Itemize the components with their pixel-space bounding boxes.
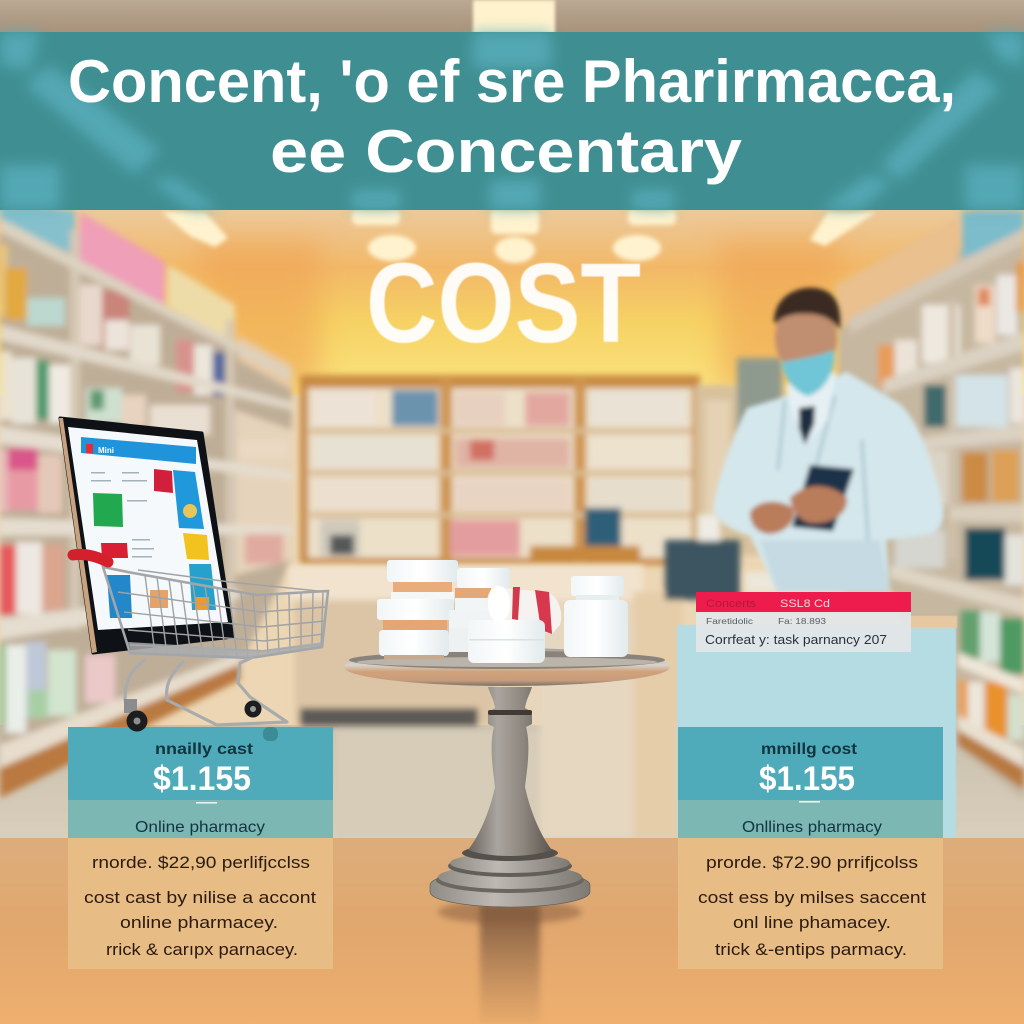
tablet with store screen — [59, 418, 233, 653]
card: right online pharmacy: onl line phamacey. — [733, 913, 891, 932]
card: right online pharmacy: prorde. $72.90 prrifjcolss — [706, 853, 918, 872]
shelf edges — [0, 218, 292, 380]
white coat — [713, 372, 944, 592]
wire basket — [118, 570, 328, 657]
ceiling lights — [162, 209, 876, 263]
shelf four goods — [0, 545, 16, 615]
far shelf goods — [235, 410, 292, 575]
pedestal stand — [344, 648, 670, 907]
wood table — [0, 838, 1024, 1024]
card: left online pharmacy — [68, 727, 333, 969]
shelf three goods — [962, 452, 988, 502]
coat folds — [778, 395, 868, 540]
card: left online pharmacy: rrick & carıpx parnacey. — [106, 940, 298, 959]
back wall shelves — [300, 358, 785, 565]
shelf one goods — [878, 345, 894, 387]
heading: ee Concentary — [270, 118, 743, 185]
counter panel — [677, 616, 957, 838]
tablet with store screen: Mini — [98, 446, 114, 455]
pharmacy comparison label: SSL8 Cd — [780, 598, 830, 610]
card: left online pharmacy: cost cast by nilise a accont — [84, 888, 316, 907]
bottle on its side — [487, 586, 561, 634]
basket floor mesh — [128, 642, 323, 659]
card: left online pharmacy: $1.155 — [153, 760, 251, 798]
central counter — [288, 515, 845, 838]
head — [775, 300, 837, 376]
shelf three goods — [0, 450, 10, 512]
posts — [70, 230, 80, 630]
card: left online pharmacy: online pharmacey. — [120, 913, 278, 932]
card: right online pharmacy: $1.155 — [759, 760, 855, 798]
shelf two goods — [924, 385, 946, 427]
title banner — [0, 32, 1024, 210]
hands — [750, 502, 794, 534]
shelf edges — [850, 228, 1024, 334]
stack one — [377, 560, 458, 659]
right bottle — [564, 576, 628, 657]
pharmacy comparison label — [696, 592, 911, 652]
card: right online pharmacy — [678, 727, 943, 969]
pharmacy comparison label: Fa: 18.893 — [778, 617, 827, 626]
shelf one goods — [0, 245, 8, 315]
card: left online pharmacy: rnorde. $22,90 perlifjcclss — [92, 853, 310, 872]
pharmacy comparison label: Corrfeat y: task parnancy 207 — [705, 632, 887, 647]
left shelving unit — [0, 208, 292, 798]
card: left online pharmacy: nnailly cast — [155, 741, 253, 758]
shopping cart — [73, 554, 328, 725]
shelf five goods — [960, 610, 980, 658]
cart front wheel and caster — [124, 699, 278, 741]
heading — [68, 48, 956, 185]
pharmacy comparison label: Faretidolic — [706, 617, 753, 626]
tie — [799, 406, 815, 445]
heading: Concent, 'o ef sre Pharirmacca, — [68, 48, 956, 115]
post — [948, 300, 956, 560]
pharmacy comparison label: Concerts — [706, 598, 757, 610]
medicine jars — [377, 560, 628, 663]
front jar — [468, 620, 545, 663]
stack two — [449, 568, 510, 652]
handheld tablet — [792, 465, 854, 531]
pharmacist — [713, 288, 944, 592]
handle — [73, 554, 108, 562]
card: right online pharmacy: Onllines pharmacy — [742, 819, 882, 836]
shelf two goods — [0, 352, 12, 420]
hair — [774, 288, 840, 330]
small wheel — [244, 700, 262, 718]
face mask — [781, 350, 834, 396]
card: left online pharmacy: Online pharmacy — [135, 819, 265, 836]
shelf four goods — [895, 530, 945, 568]
neck and shirt — [786, 372, 836, 445]
shelf five goods — [0, 645, 8, 725]
screen — [68, 427, 228, 630]
basket rim — [103, 567, 328, 658]
card: right online pharmacy: mmillg cost — [761, 741, 857, 758]
legs — [125, 657, 287, 725]
card: right online pharmacy: cost ess by milses saccent — [698, 888, 926, 907]
right shelving unit — [835, 212, 1024, 800]
shelf six goods — [958, 680, 968, 725]
card: right online pharmacy: trick &-entips parmacy. — [715, 940, 907, 959]
column — [468, 687, 552, 856]
tray — [344, 648, 670, 686]
base tiers — [430, 845, 590, 907]
COST heading: COST — [366, 240, 641, 366]
